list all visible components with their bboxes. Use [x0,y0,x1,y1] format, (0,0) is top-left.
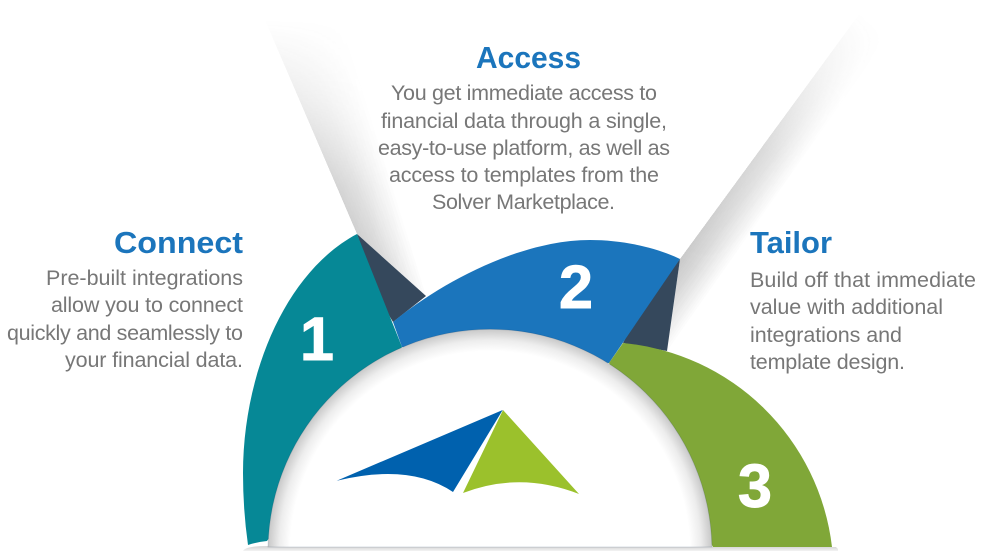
text block: Connect description: allow you to connect [51,293,243,317]
text block: Access description: Solver Marketplace. [432,190,615,214]
heading: Connect: Connect [114,225,243,260]
text block: Tailor description: Build off that immediate [750,268,976,292]
base shadow line [243,546,838,551]
text block: Tailor description: value with additional [750,295,943,319]
fold: left dark triangle [357,234,426,322]
text block: Connect description: your financial data. [65,348,243,372]
text block: Access description [378,81,670,214]
text block: Tailor description: integrations and [750,323,902,347]
number 1: 1 [300,305,334,373]
text block: Access description: access to templates from the [389,163,659,187]
heading: Tailor: Tailor [750,225,832,260]
number 3: 3 [738,452,772,520]
text block: Tailor description [750,268,976,374]
inner white semicircle [268,329,712,547]
heading: Access: Access [476,40,581,75]
text block: Connect description [7,266,243,372]
logo: green sail [463,410,579,494]
number 2: 2 [559,253,593,321]
text block: Connect description: quickly and seamlessly to [7,321,243,345]
segment 2: blue [393,240,680,363]
segment 1: teal [243,234,402,545]
fold: right dark triangle [623,259,680,351]
text block: Connect description: Pre-built integrations [46,266,243,290]
text block: Access description: financial data through a single, [381,109,667,133]
logo [337,410,579,494]
segment 3: green [609,343,832,547]
logo: blue sail [337,410,503,492]
text block: Tailor description: template design. [750,350,905,374]
left fan shadow [280,54,418,288]
right fan shadow [669,48,835,340]
text block: Access description: You get immediate access to [391,81,657,105]
text block: Access description: easy-to-use platform, as well as [378,136,670,160]
